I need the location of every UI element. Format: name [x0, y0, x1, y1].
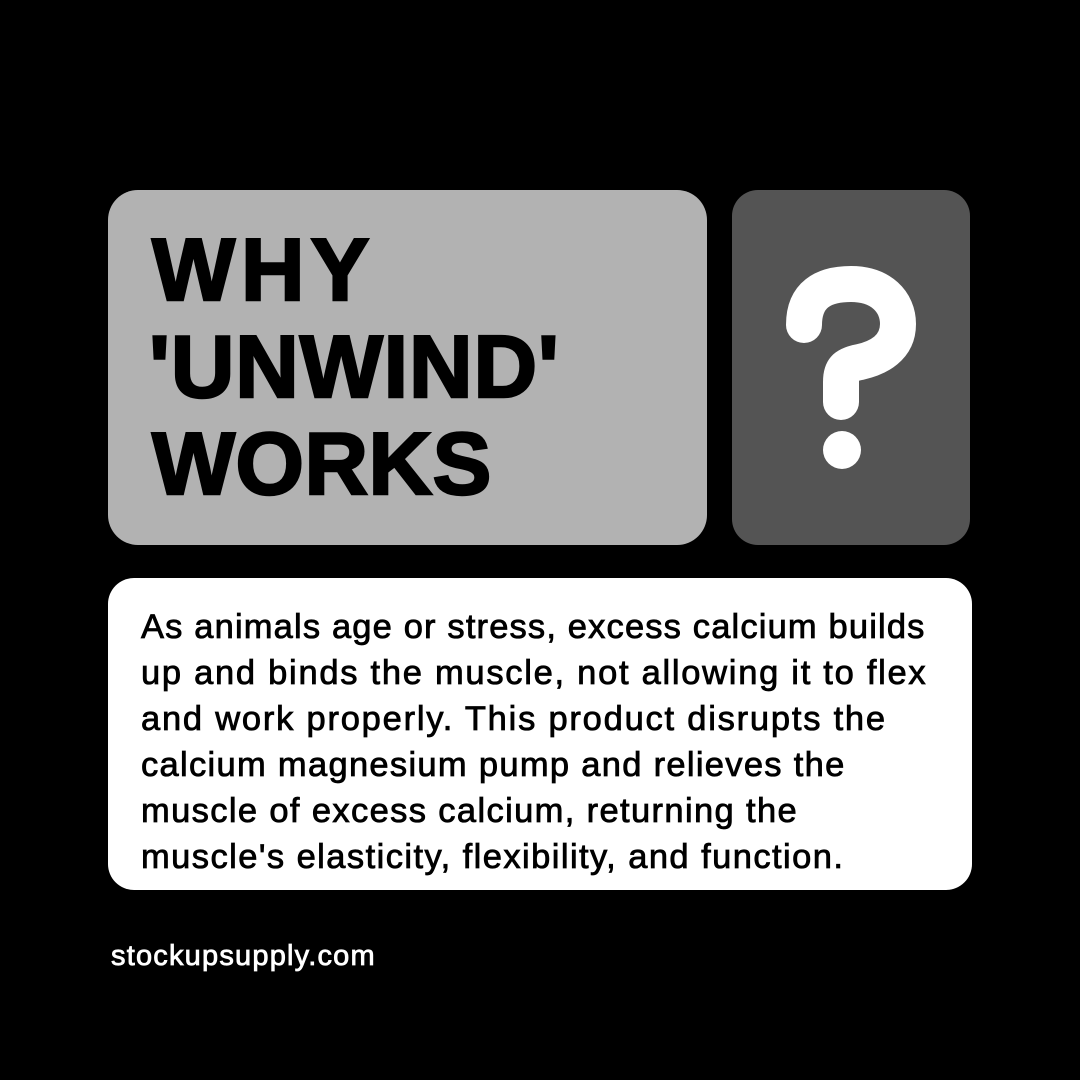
icon: question mark: [786, 266, 916, 469]
heading line: WORKS: WORKS: [152, 414, 492, 513]
body line 1: As animals age or stress, excess calcium builds: [141, 608, 926, 646]
body line 5: muscle of excess calcium, returning the: [141, 792, 798, 830]
heading line: UNWIND: 'UNWIND': [149, 317, 560, 416]
panel: question mark: [732, 190, 970, 545]
heading line: WHY: WHY: [152, 220, 375, 319]
panel: title: [108, 190, 707, 545]
panel: explanation: [108, 578, 972, 890]
body line 2: up and binds the muscle, not allowing it to flex: [141, 654, 927, 692]
body line 3: and work properly. This product disrupts the: [141, 700, 887, 738]
body line 4: calcium magnesium pump and relieves the: [141, 746, 846, 784]
body line 6: muscle's elasticity, flexibility, and function.: [141, 838, 844, 876]
website footer: stockupsupply.com: [111, 940, 376, 972]
